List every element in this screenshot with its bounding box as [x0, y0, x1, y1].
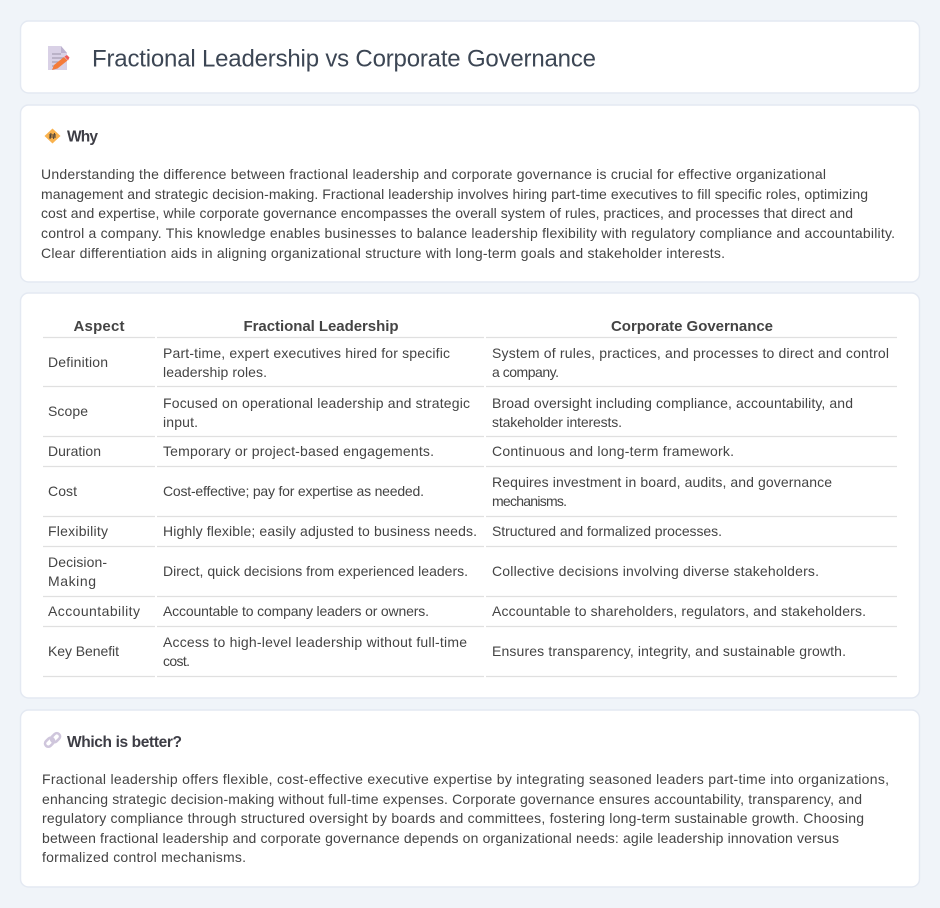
heading: which is better: Which is better?: [67, 734, 182, 751]
row: definition: [48, 345, 889, 380]
row: decision-making: Decision-: [48, 554, 107, 570]
row: decision-making: Direct, quick decisions from experienced leaders.: [163, 563, 468, 579]
text block: which is better: formalized control mechanisms.: [42, 849, 246, 865]
icon: document with pencil: [48, 46, 70, 70]
row: flexibility: Flexibility: [48, 523, 108, 539]
row: accountability: Accountable to shareholders, regulators, and stakeholders.: [492, 603, 866, 619]
row: decision-making: [48, 554, 819, 589]
row: duration: [48, 443, 734, 459]
row: duration: Temporary or project-based engagements.: [163, 443, 434, 459]
table header: Corporate Governance: [611, 318, 773, 335]
title: Fractional Leadership vs Corporate Governance: [92, 46, 596, 72]
row: accountability: [48, 603, 866, 619]
panel: why: [20, 105, 920, 282]
row: scope: [48, 395, 853, 430]
row: definition: System of rules, practices, and processes to direct and control: [492, 345, 889, 361]
panel: comparison table: [20, 293, 920, 698]
row: definition: Definition: [48, 354, 108, 370]
table header: Aspect: [74, 318, 124, 335]
row: cost: Cost: [48, 483, 77, 499]
row: key benefit: Access to high-level leadership without full-time: [163, 634, 467, 650]
text block: why: cost and expertise, while corporate governance encompasses the overall system of rules, practices, and processes that direct and: [41, 205, 853, 221]
text block: why: [41, 166, 895, 261]
row: scope: input.: [163, 414, 198, 430]
text block: which is better: between fractional leadership and corporate governance depends on organizational needs: agile leadership innovation versus: [42, 830, 839, 846]
row: duration: Continuous and long-term framework.: [492, 443, 734, 459]
row: definition: leadership roles.: [163, 364, 267, 380]
row: key benefit: Key Benefit: [48, 643, 119, 659]
row: flexibility: [48, 523, 722, 539]
panel: which is better: [20, 710, 920, 887]
row: cost: [48, 474, 832, 509]
row: key benefit: Ensures transparency, integrity, and sustainable growth.: [492, 643, 846, 659]
row: duration: Duration: [48, 443, 101, 459]
row: scope: Broad oversight including compliance, accountability, and: [492, 395, 853, 411]
text block: why: management and strategic decision-making. Fractional leadership involves hiring part-time executives to fill specific roles, optimizing: [41, 186, 868, 202]
table header: [74, 318, 773, 335]
row: definition: Part-time, expert executives hired for specific: [163, 345, 450, 361]
text block: which is better: regulatory compliance through structured oversight by boards and committees, fostering long-term sustainable growth. Choosing: [42, 810, 864, 826]
row: scope: Scope: [48, 403, 88, 419]
row: definition: a company.: [492, 364, 559, 380]
text block: which is better: Fractional leadership offers flexible, cost-effective executive expertise by integrating seasoned leaders part-time into organizations,: [42, 771, 889, 787]
text block: which is better: enhancing strategic decision-making without full-time expenses. Corporate governance ensures accountability, transparency, and: [42, 791, 862, 807]
icon: warning diamond: [44, 128, 60, 144]
heading: why: Why: [67, 128, 98, 146]
row: flexibility: Highly flexible; easily adjusted to business needs.: [163, 523, 477, 539]
icon: chain link: [44, 732, 61, 748]
row: flexibility: Structured and formalized processes.: [492, 523, 722, 539]
row: key benefit: cost.: [163, 653, 190, 669]
text block: why: Clear differentiation aids in aligning organizational structure with long-term goals and stakeholder interests.: [41, 245, 725, 261]
text block: which is better: [42, 771, 889, 865]
text block: why: Understanding the difference between fractional leadership and corporate governance is crucial for effective organizational: [41, 166, 826, 182]
row: cost: mechanisms.: [492, 493, 567, 509]
row: cost: Cost-effective; pay for expertise as needed.: [163, 483, 424, 499]
row: cost: Requires investment in board, audits, and governance: [492, 474, 832, 490]
row: decision-making: Making: [48, 573, 96, 589]
text block: why: control a company. This knowledge enables businesses to balance leadership flexibility with regulatory compliance and accountability.: [41, 225, 895, 241]
row: accountability: Accountable to company leaders or owners.: [163, 603, 429, 619]
row: key benefit: [48, 634, 846, 669]
row: scope: stakeholder interests.: [492, 414, 622, 430]
table header: Fractional Leadership: [244, 318, 398, 335]
row: scope: Focused on operational leadership and strategic: [163, 395, 470, 411]
row: decision-making: Collective decisions involving diverse stakeholders.: [492, 563, 819, 579]
row: accountability: Accountability: [48, 603, 140, 619]
panel: header: [20, 21, 920, 93]
